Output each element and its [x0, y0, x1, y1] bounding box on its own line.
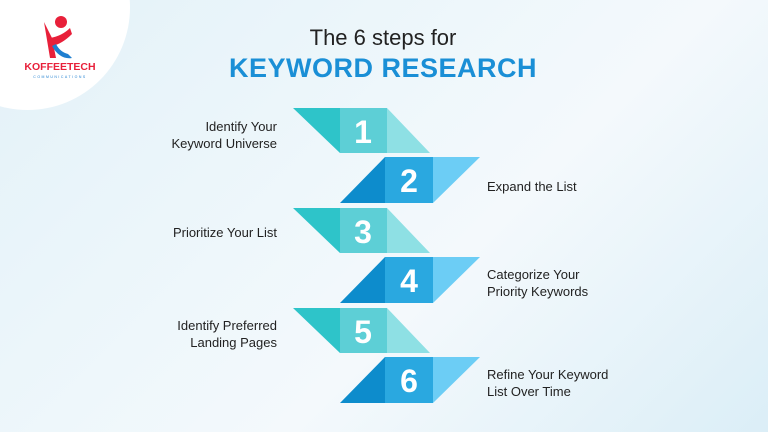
label 1: Identify Your	[205, 119, 277, 134]
label 5	[177, 318, 277, 350]
logo: COMMUNICATIONS	[33, 75, 87, 79]
step 3: 3	[354, 214, 372, 250]
label 5: Identify Preferred	[177, 318, 277, 333]
step 2: 2	[400, 163, 418, 199]
logo circle	[0, 0, 130, 110]
label 2: Expand the List	[487, 179, 577, 194]
label 6: Refine Your Keyword	[487, 367, 608, 382]
label 1: Keyword Universe	[172, 136, 277, 151]
step 3	[293, 208, 430, 253]
label 4	[487, 267, 588, 299]
step 5	[293, 308, 430, 353]
step 6: 6	[400, 363, 418, 399]
title: The 6 steps for	[310, 25, 456, 50]
step 1: 1	[354, 114, 372, 150]
step 2	[340, 157, 480, 203]
step 6	[340, 357, 480, 403]
label 3: Prioritize Your List	[173, 225, 277, 240]
label 6	[487, 367, 608, 399]
label 4: Categorize Your	[487, 267, 580, 282]
label 1	[172, 119, 277, 151]
step 5: 5	[354, 314, 372, 350]
logo	[24, 16, 96, 79]
step 4: 4	[400, 263, 418, 299]
step 4	[340, 257, 480, 303]
logo: KOFFEETECH	[24, 61, 96, 73]
title	[229, 25, 537, 83]
label 5: Landing Pages	[190, 335, 277, 350]
label 4: Priority Keywords	[487, 284, 588, 299]
label 6: List Over Time	[487, 384, 571, 399]
step 1	[293, 108, 430, 153]
title: KEYWORD RESEARCH	[229, 53, 537, 83]
